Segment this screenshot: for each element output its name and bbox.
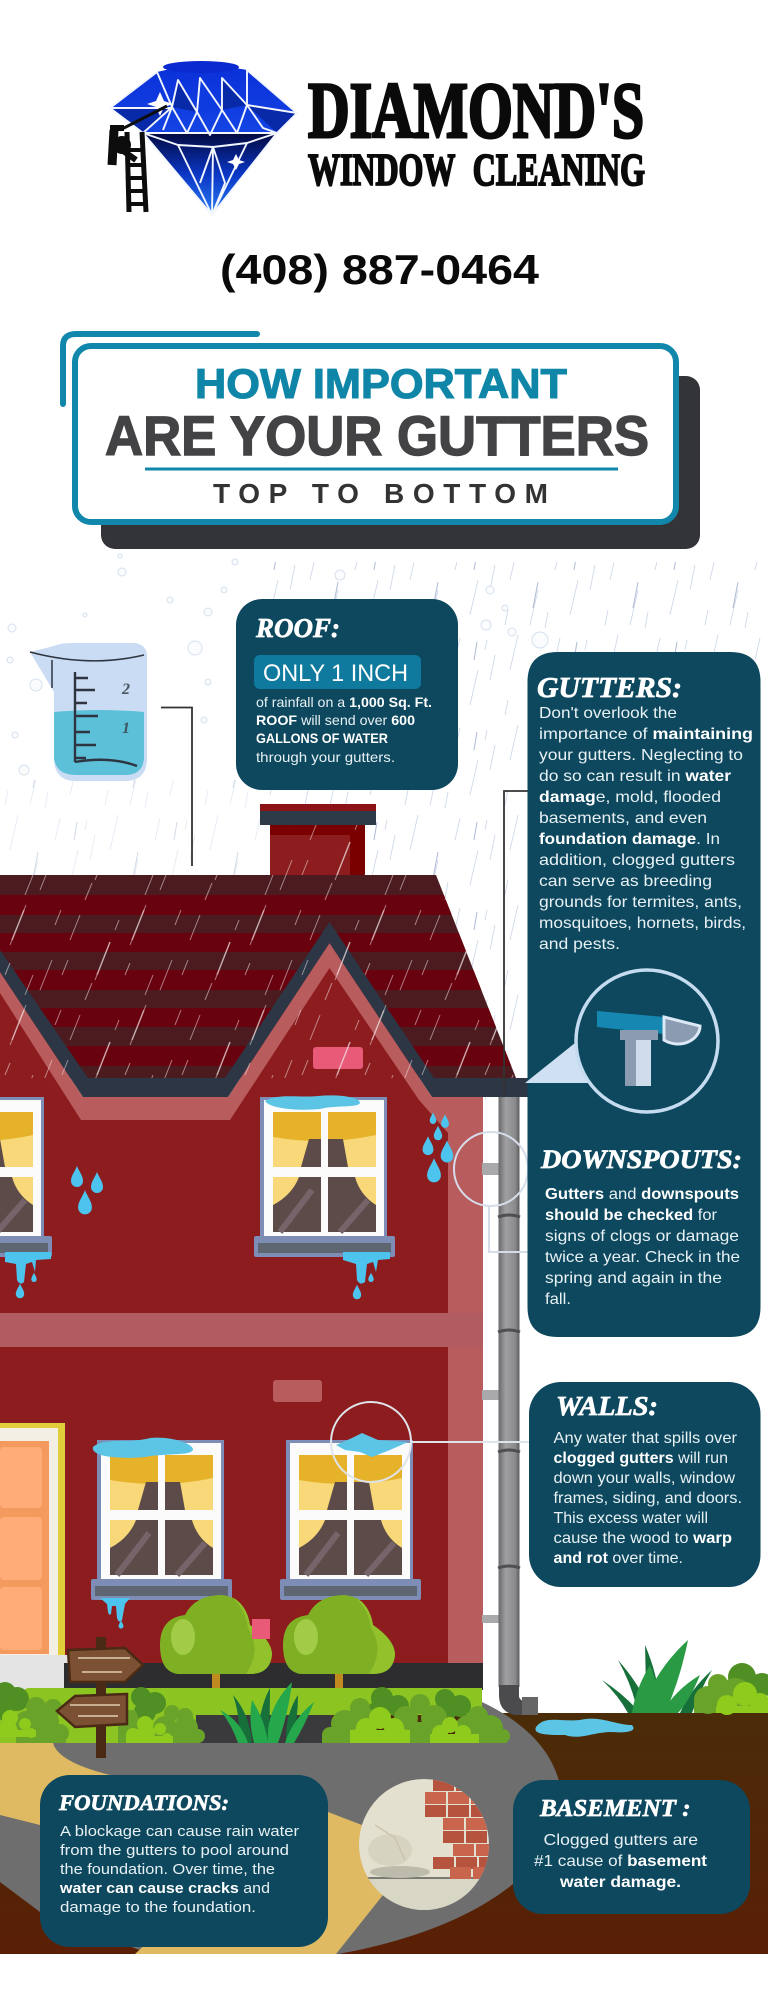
- title card: [63, 334, 700, 549]
- pink mailbox: [252, 1619, 270, 1639]
- drip upper center window: [343, 1252, 390, 1299]
- water puddle upper window: [265, 1095, 360, 1110]
- title card accent line: [63, 334, 257, 404]
- spiky plant center: [220, 1682, 314, 1743]
- gutters body text: importance of maintaining: [539, 726, 753, 743]
- icon: gutter in circle: [576, 970, 718, 1112]
- drip lower left window: [100, 1598, 130, 1629]
- heading underline: [145, 468, 618, 470]
- foundations body text: damage to the foundation.: [60, 1899, 256, 1916]
- gutters body text: can serve as breeding: [539, 873, 712, 890]
- window lower right: [280, 1440, 421, 1600]
- water puddle lower left window: [93, 1438, 193, 1458]
- downspouts body text: signs of clogs or damage: [545, 1228, 739, 1245]
- subheading: TOP TO BOTTOM: [213, 478, 548, 509]
- walls body text: and rot over time.: [554, 1550, 683, 1567]
- measuring beaker: 1: [122, 720, 130, 737]
- gutters heading: GUTTERS:: [537, 673, 682, 704]
- downspouts body text: Gutters and downspouts: [545, 1186, 739, 1203]
- walls body text: down your walls, window: [554, 1470, 735, 1487]
- walls body text: Any water that spills over: [554, 1430, 738, 1447]
- ground puddle: [535, 1719, 633, 1737]
- bushes right: [322, 1687, 510, 1743]
- heading line 2: ARE YOUR GUTTERS: [105, 404, 649, 467]
- water droplets on wall right: [423, 1112, 453, 1182]
- front yard: [0, 1595, 768, 1758]
- panel: foundations: [40, 1775, 328, 1947]
- drip upper left window: [5, 1252, 51, 1298]
- logo wordmark line 1: DIAMOND'S: [308, 68, 644, 155]
- gutters body text: your gutters. Neglecting to: [539, 747, 743, 764]
- walls body text: clogged gutters will run: [554, 1450, 728, 1467]
- connector: beaker to roof: [161, 708, 192, 866]
- downspouts body text: twice a year. Check in the: [545, 1249, 740, 1266]
- downspouts body text: fall.: [545, 1291, 571, 1308]
- panel: walls: [529, 1382, 760, 1587]
- basement heading: BASEMENT :: [539, 1796, 690, 1822]
- lawn: [0, 1688, 482, 1743]
- water droplets on wall left: [71, 1166, 103, 1214]
- panel: roof: [236, 599, 458, 790]
- title card shadow: [101, 376, 700, 549]
- spiky plant right: [602, 1640, 712, 1713]
- roof pink vent: [313, 1047, 363, 1069]
- logo icon: window cleaner on ladder: [110, 106, 167, 212]
- downspout pipe: [482, 1097, 538, 1715]
- middle pink band: [0, 1313, 483, 1347]
- window upper left: [0, 1097, 52, 1257]
- shrub right: [283, 1595, 395, 1688]
- driveway: [0, 1702, 562, 1954]
- gutters body text: and pests.: [539, 936, 620, 953]
- walls body text: cause the wood to warp: [554, 1530, 732, 1547]
- ground: [0, 1702, 768, 1954]
- bushes left: [0, 1682, 205, 1743]
- callout ring: downspout: [454, 1132, 536, 1252]
- chimney: [260, 804, 376, 877]
- roof body text: [256, 694, 432, 765]
- roof body text: ROOF will send over 600: [256, 712, 415, 728]
- measuring beaker: [30, 643, 147, 781]
- foundations body text: A blockage can cause rain water: [60, 1823, 299, 1840]
- basement body text: water damage.: [559, 1874, 681, 1891]
- gutters body text: Don't overlook the: [539, 705, 677, 722]
- logo icon: blue diamond: [110, 61, 297, 215]
- walls body text: This excess water will: [554, 1510, 708, 1527]
- foundations body text: [59, 1823, 299, 1916]
- walls body text: frames, siding, and doors.: [554, 1490, 742, 1507]
- rain streaks on house: [0, 875, 530, 1085]
- basement body text: Clogged gutters are: [544, 1832, 698, 1849]
- gutters body text: do so can result in water: [539, 768, 731, 785]
- connector: gutters panel to gutter: [504, 791, 528, 1095]
- window lower left: [91, 1440, 232, 1600]
- gutters body text: damag e, mold, flooded: [539, 789, 721, 806]
- shrub left: [160, 1595, 272, 1688]
- walls body text: [554, 1430, 742, 1567]
- gutters body text: addition, clogged gutters: [539, 852, 735, 869]
- house: [0, 804, 530, 1690]
- cracked brick wall image: [359, 1779, 490, 1911]
- title card box: [75, 346, 676, 522]
- roof: [0, 875, 530, 1085]
- panel: gutters: [525, 652, 760, 1337]
- callout ring: wall window: [331, 1402, 539, 1482]
- upper wall: [0, 968, 448, 1313]
- heading line 1: HOW IMPORTANT: [195, 360, 567, 407]
- roof body text: of rainfall on a 1,000 Sq. Ft.: [256, 694, 432, 710]
- signpost: [57, 1637, 143, 1758]
- foundations heading: FOUNDATIONS:: [58, 1790, 229, 1815]
- door: [0, 1423, 68, 1690]
- gutters body text: foundation damage . In: [539, 831, 720, 848]
- phone number: (408) 887-0464: [220, 246, 540, 293]
- walls heading: WALLS:: [556, 1391, 658, 1421]
- downspouts body text: [545, 1186, 740, 1308]
- gutters body text: grounds for termites, ants,: [539, 894, 742, 911]
- gutters body text: mosquitoes, hornets, birds,: [539, 915, 746, 932]
- basement body text: [534, 1832, 708, 1891]
- walkway: [196, 1715, 332, 1743]
- foundations body text: the foundation. Over time, the: [60, 1861, 275, 1878]
- logo: [110, 61, 645, 215]
- water splash lower right window: [336, 1433, 408, 1457]
- foundations body text: from the gutters to pool around: [60, 1842, 289, 1859]
- chimney rain: [270, 825, 365, 875]
- pink wall trim: [0, 943, 483, 1690]
- gutters body text: [539, 705, 753, 953]
- only 1 inch pill: ONLY 1 INCH: [263, 660, 408, 687]
- lower wall: [0, 1347, 448, 1667]
- callout pointer: [525, 1043, 590, 1083]
- measuring beaker: 2: [121, 681, 130, 698]
- roof body text: through your gutters.: [256, 749, 395, 765]
- basement body text: #1 cause of basement: [534, 1853, 708, 1870]
- downspouts heading: DOWNSPOUTS:: [540, 1145, 742, 1174]
- bushes far right: [694, 1663, 768, 1715]
- window upper center: [254, 1097, 395, 1257]
- downspouts body text: spring and again in the: [545, 1270, 722, 1287]
- wall vent: [273, 1380, 322, 1402]
- roof body text: GALLONS OF WATER: [256, 730, 388, 746]
- soil: [0, 1713, 768, 1954]
- sand path lower: [135, 1812, 387, 1954]
- panel: basement: [513, 1780, 750, 1914]
- gutters body text: basements, and even: [539, 810, 707, 827]
- roof heading: ROOF:: [255, 613, 340, 643]
- foundations body text: water can cause cracks and: [59, 1880, 270, 1897]
- house base: [64, 1663, 483, 1690]
- sand path upper: [0, 1738, 110, 1825]
- dark roof trim: [0, 922, 528, 1097]
- rain background: [0, 542, 768, 1102]
- downspouts body text: should be checked for: [545, 1207, 718, 1224]
